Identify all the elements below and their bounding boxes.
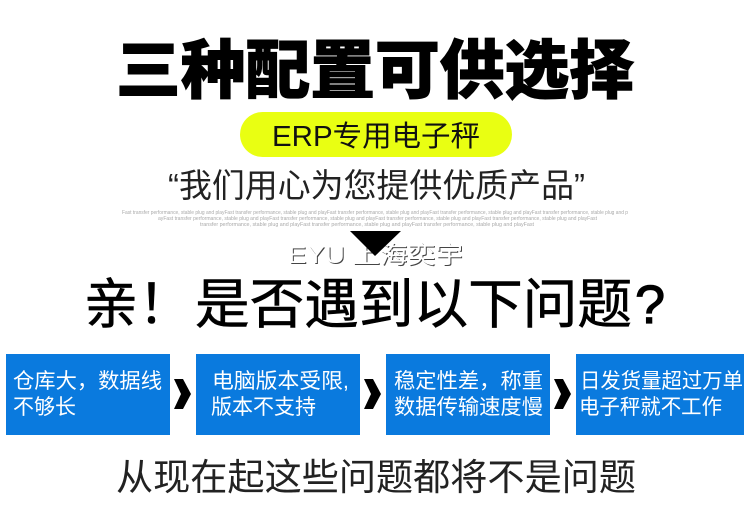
arrow 2 [364, 379, 381, 409]
arrow 3 [554, 379, 571, 409]
panel: problem 3: 数据传输速度慢 [394, 396, 543, 419]
question heading: 亲！ [84, 275, 192, 335]
watermark: EYU 上海奕宇 [289, 243, 464, 270]
panel: problem 3: 稳定性差，称重 [394, 370, 543, 393]
panel: problem 3 [386, 354, 550, 435]
closing statement: 从现在起这些问题都将不是问题 [116, 457, 636, 498]
panel: problem 4: 电子秤就不工作 [579, 396, 722, 419]
panel: problem 2: 版本不支持 [211, 396, 316, 419]
icon: down triangle [350, 231, 401, 256]
panel: problem 1: 仓库大，数据线 [13, 370, 162, 393]
title: 三种配置可供选择 [116, 35, 634, 107]
arrow 1 [174, 379, 191, 409]
panel: problem 1: 不够长 [13, 396, 76, 419]
panel: problem 4: 日发货量超过万单 [580, 370, 743, 393]
fine print text block: ayFast transfer performance, stable plug and playFast transfer performance, stable plug and playFast transfer performance, stable plug and playFast transfer performance, stable plug and playFast [158, 216, 598, 222]
panel: problem 2 [196, 354, 360, 435]
panel: problem 4 [576, 354, 744, 435]
watermark: EYU 上海奕宇 [288, 242, 463, 269]
subtitle: “我们用心为您提供优质产品” [168, 167, 585, 204]
fine print text block [122, 210, 628, 228]
fine print text block: Fast transfer performance, stable plug and playFast transfer performance, stable plug and playFast transfer performance, stable plug and playFast transfer performance, stable plug and playFast transfer performance, stable plug and p [122, 210, 628, 216]
panel: problem 2: 电脑版本受限, [212, 370, 349, 393]
question heading: ? [635, 275, 665, 335]
badge: ERP dedicated scale: ERP专用电子秤 [272, 120, 480, 153]
fine print text block: transfer performance, stable plug and playFast transfer performance, stable plug and playFast transfer performance, stable plug and playFast [200, 222, 535, 228]
badge: ERP dedicated scale [240, 112, 512, 157]
question heading: 是否遇到以下问题 [195, 275, 632, 335]
panel: problem 1 [6, 354, 170, 435]
